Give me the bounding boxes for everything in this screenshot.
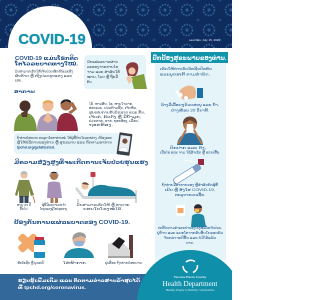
symptoms list: ສູນເສຍການຮັບລົດຊາດ ແລະ ກິ່ນ, [89,109,145,114]
text: testing: ກະລຸນາກວດເຊື້ອ. [175,192,205,198]
icon: person resting at home [108,235,133,258]
callout: call your doctor: tpchd.org/getattested. [17,146,55,150]
footer: ຮຽນຮູ້ເພີ່ມເຕີມ ແລະ ຕິດຕາມຂ່າວສານລ້າສຸດໄດ້ [18,277,140,285]
callout: call your doctor [14,133,120,154]
callout: how it spreads: ມັນແຜ່ລະບາດຜ່ານ [86,59,119,64]
caption: stay home: ຢູ່ເຮືອນ ຖ້າທ່ານບໍ່ສະບາຍ. [105,260,143,265]
text: vaccination [160,66,213,76]
callout: call your doctor: ຜູ້ໃຫ້ບໍລິການຂອງທ່ານ ຫຼື ສຸຂະພາບ ແລະ ຕິດຕາມອາການ [17,139,113,146]
icon: vaccine vial and bandage [17,233,45,258]
caption: age [17,202,31,211]
caption: health conditions: ໂຕຮຸນແຮງຜູ້ໃຫຍ່ທຸກອາຍຸ. [39,206,68,212]
panel heading [151,52,228,63]
icon: man with mask [64,232,94,258]
callout: call your doctor: ຖ້າທ່ານບໍ່ສະບາຍ ກະລຸນາໂທຫາທ່ານໝໍ. ໃຫ້ຢູ່ທີ່ບ້ານໃນລະຫວ່າງ. ບໍ່ຕ້ອງຄອຍ [17,135,113,141]
callout: how it spreads: ລະອອງຈາກການໄອ [87,64,118,69]
symptoms list: ອ່ອນເພຍ, ປວດກ້າມຊີ້ນ, ເຈັບຫົວ, [89,105,137,110]
footer [0,274,232,300]
icon: person with tissue [177,116,203,145]
intro text: ມັນສາມາດເຮັດໃຫ້ເຈັບປ່ວຍໜັກໄດ້ແລະສົ່ງ [14,68,73,74]
text: wash hands: ລ້າງມືເລື້ອຍໆດ້ວຍສະບູ ແລະ ນ້ຳ, [160,102,219,107]
symptoms list: ປວດຮາກ, ຮາກ, ຖອກທ້ອງ, ເມື່ອຍ, [89,118,139,123]
department name: Health Department [163,280,217,288]
text: wash hands [160,102,219,112]
department name: Tacoma-Pierce County [174,275,206,279]
callout: how it spreads [84,55,147,89]
illustration: three people with symptoms [14,99,78,131]
callout: how it spreads: ໝາຍ, ໂດຍ ຫຼື ຖືກມື [87,74,119,79]
icon: phone with doctor [117,132,132,156]
text: stay home when sick [157,225,223,245]
intro heading: ໂຕໄວລະບາດທາງໃໝ່. [14,60,79,68]
symptoms list: ເຈັບຄໍ, ຄັດດັງ ຫຼື ມີນ້ຳມູກ, [89,114,141,119]
symptoms list: ຖອກທ້ອງ. [89,122,113,127]
caption: severe illness: ມັນສາມາດເຮັດໃຫ້ ຫຼື ອາດຈະ [76,202,130,207]
intro text: ເສຍ. [15,78,22,82]
caption: severe illness: ນອນໃນໂຮງໝໍໄດ້. [83,206,123,211]
panel: protect your health [151,52,228,260]
text: testing: ເປັນ ຫຼື ສົງໃສ COVID-19, [165,187,215,192]
section heading: symptoms: ອາການ [14,89,36,94]
text: testing: ຖ້າທ່ານມີອາການຂອງ ຫຼືສຳຜັດກັບຜູ້ທີ່ [161,182,219,187]
icon: test kit [173,159,204,184]
department name [163,275,217,292]
caption: severe illness [76,202,130,211]
intro heading [14,55,79,68]
intro text: ຜົນຮ້າຍ ຫຼື ເຖິງປ່ວຍຮຸນແຮງ ແລະ [15,73,73,79]
section heading: high risk groups: ມີຄວາມສ່ຽງສູງທີ່ຈະເກີດການເຈັບປ່ວຍຮຸນແຮງ [14,159,148,167]
icon: logo triad [183,260,198,272]
caption: health conditions: ຜູ້ທີ່ມີພະຍາດປະຈຳ [42,202,66,207]
icon: woman with condition [47,172,62,203]
text: cover coughs: ເມື່ອໄອ ແລະ ຈາມ ໃຊ້ຜ້າເຊັດ ຫຼື ແຂນເສື້ອ. [160,149,220,154]
text: stay home when sick: ຢູ່ບ້ານ ແລະ ແຍກໂຕຈາກຄົນອື່ນໃນຄອບຄົວ [157,230,223,235]
caption: age: ຂຶ້ນໄປ. [20,206,28,211]
text: vaccination: ເຮັດໃຫ້ຕ່ານຮັບວັກຊີນປົກກັນ [160,66,213,71]
intro heading: COVID-19 ແມ່ນໂຣກຕິດ [15,55,78,62]
text: stay home when sick: ນານ. [186,241,194,245]
text: testing [161,182,219,198]
text: cover coughs [160,145,220,154]
intro text [14,68,73,82]
callout: how it spreads: ກັບ. [86,79,93,84]
caption: age: ອາຍຸ 65 ປີ [17,202,31,208]
caption: mask: ໃສ່ໜ້າກາກ. [63,260,87,265]
section heading: prevention: ປ້ອງກັນການແຜ່ລະບາດຂອງ COVID-19. [14,219,131,226]
text: stay home when sick: ປະຕິບັດຕາມຄຳແນະນຳຂອງໂຮງໝໍເມື່ອເຈັບປ່ວຍ, [158,225,222,230]
revision date: Last Rev. July 15, 2020 [189,38,220,42]
header banner [0,0,232,48]
panel heading: ປົກປ້ອງສຸຂະພາບຂອງທ່ານ. [152,55,227,63]
text: stay home when sick: ຈົນກວ່າຈະດີຂຶ້ນ ແລະ ບໍ່ມີໄຂ້ແລ້ວ [163,235,216,240]
icon: cup and person in mask [176,204,206,227]
footer: ທີ່ tpchd.org/coronavirus. [18,284,86,290]
text: cover coughs: ປົກປາກ ແລະ ດັງ, [169,145,206,150]
department name: Healthy People in Healthy Communities [165,288,215,292]
text: vaccination: ແລະບູດສເຕີ ຕາມກຳນົດ. [160,71,210,76]
symptoms list: ໄຂ້, ຫາວສັ່ນ, ໄອ, ຫາຍໃຈຍາກ, [89,101,133,106]
caption: health conditions [39,202,68,212]
icon: older man with cane [15,171,35,203]
text: wash hands: ຢ່າງໜ້ອຍ 20 ວິນາທີ. [171,107,209,112]
caption: vaccine: ສັກວັກຊີນ ຫຼື ບູດສເຕີ. [18,260,45,265]
icon: washing hands [176,86,203,100]
logo badge: health department [137,250,232,300]
callout: how it spreads: ຈາມ ແລະ ສຳຜັດໃກ້ [87,69,121,74]
symptoms list [89,101,145,127]
title: COVID-19 [18,32,86,48]
icon: woman coughing [126,62,147,89]
icon: patient in hospital bed [75,172,136,203]
